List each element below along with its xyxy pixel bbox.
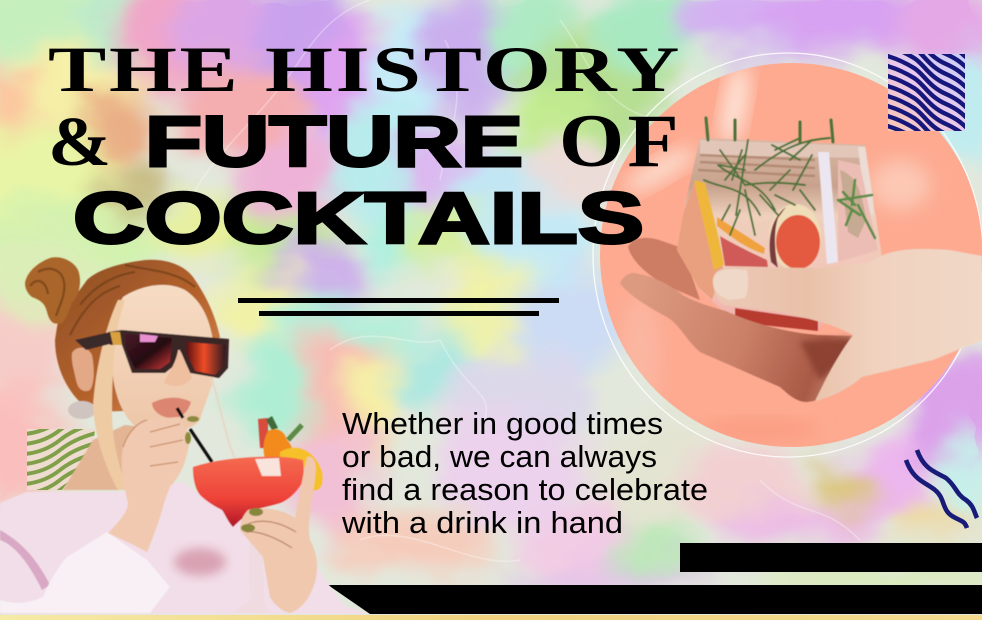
intro text: find a reason to celebrate — [342, 472, 708, 507]
marble veins — [190, 0, 860, 561]
straw — [177, 408, 212, 462]
forearm and left hand — [108, 417, 190, 552]
woman with cocktail — [0, 257, 368, 614]
glass — [675, 118, 882, 334]
thumb nail — [713, 269, 748, 300]
title — [48, 34, 682, 259]
pattern square: navy waves — [888, 54, 965, 131]
back fingers — [628, 238, 700, 300]
fig slice — [769, 204, 821, 270]
title: OF — [559, 100, 682, 183]
hair strands — [30, 265, 195, 335]
hair bun — [25, 257, 80, 324]
intro text — [341, 406, 708, 540]
grey shadow under hair — [68, 401, 96, 419]
sleeve — [0, 532, 170, 613]
palm — [620, 273, 862, 402]
rosemary sprig — [704, 118, 875, 238]
title: COCKTAILS — [73, 179, 644, 259]
intro text: Whether in good times — [342, 406, 663, 441]
face — [111, 285, 215, 433]
hand holding cocktail glass — [620, 118, 982, 402]
intro text: with a drink in hand — [341, 505, 623, 540]
headline rules — [238, 298, 559, 316]
squiggle lines — [906, 450, 977, 528]
garnish — [258, 416, 323, 490]
hand-glass circle panel — [593, 53, 982, 457]
title: & — [48, 104, 111, 181]
blonde hair strand — [93, 300, 128, 490]
gold footer stripe — [0, 615, 982, 620]
intro text: or bad, we can always — [342, 439, 657, 474]
pattern square: green waves — [27, 429, 95, 490]
hair back — [55, 260, 220, 412]
ear — [72, 348, 94, 391]
right hand — [240, 457, 317, 613]
title: THE HISTORY — [48, 34, 682, 106]
peach circle — [600, 63, 982, 447]
white ring — [593, 53, 982, 457]
black bar lower — [328, 585, 982, 614]
neck — [63, 425, 170, 490]
thumb — [713, 249, 982, 401]
nails — [187, 416, 199, 422]
sunglasses — [75, 330, 229, 378]
palm shadow — [800, 338, 858, 380]
sweater — [0, 482, 368, 614]
sweater chest shading — [174, 548, 226, 576]
coupe glass — [193, 457, 304, 613]
black bar upper — [680, 543, 982, 572]
title: FUTURE — [145, 103, 523, 182]
sweater fold — [0, 530, 50, 590]
nose and lips — [164, 350, 192, 386]
